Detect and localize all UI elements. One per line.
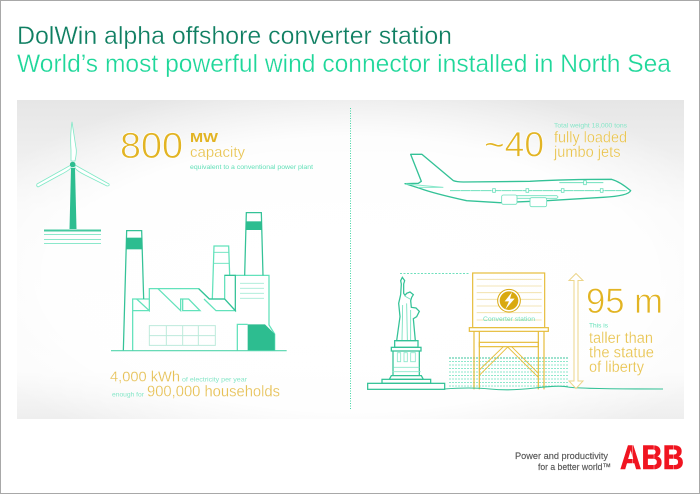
panel: background — [17, 100, 684, 419]
logo: ABB: ABB — [620, 439, 684, 477]
text: 95 m: the statue — [589, 345, 654, 362]
icon: converter station platform — [469, 273, 548, 389]
text: 40 jumbo jets: jumbo jets — [553, 144, 621, 161]
text: 95 m: This is — [589, 324, 608, 330]
title — [17, 22, 671, 78]
text: 40 jumbo jets: Total weight 18,000 tons — [554, 122, 627, 130]
text: 800 MW capacity: 800 — [120, 125, 183, 166]
text: 800 MW capacity: equivalent to a conventional power plant — [190, 164, 313, 171]
text: 95 m — [586, 282, 663, 376]
arrow: height — [569, 274, 583, 388]
title: World’s most powerful wind connector installed in North Sea — [17, 50, 671, 78]
text: 800 MW capacity — [120, 125, 313, 171]
text: 800 MW capacity: MW — [190, 130, 219, 145]
text: 800 MW capacity: capacity — [190, 144, 245, 161]
ground wave line — [444, 386, 663, 390]
icon: wind turbine — [37, 122, 109, 244]
text: 4,000 kWh households — [110, 368, 280, 401]
icon: jumbo jet — [405, 154, 631, 207]
footer tagline — [515, 451, 611, 473]
icon: statue of liberty — [368, 277, 445, 389]
text: 4,000 kWh households: enough for — [112, 393, 144, 399]
text: 95 m: taller than — [589, 330, 653, 347]
label: converter station: Converter station — [483, 316, 535, 323]
text: 40 jumbo jets: ~40 — [484, 126, 544, 165]
title: DolWin alpha offshore converter station — [17, 22, 452, 50]
text: 95 m: 95 m — [586, 282, 663, 321]
text: 95 m: of liberty — [589, 359, 644, 376]
text: 4,000 kWh households: 900,000 households — [147, 384, 280, 401]
dashed height line — [400, 272, 470, 274]
text: 40 jumbo jets — [484, 122, 627, 165]
icon: power plant — [111, 213, 287, 351]
text: 4,000 kWh households: of electricity per year — [182, 378, 247, 384]
water lines — [449, 358, 568, 386]
footer tagline: Power and productivity — [515, 451, 608, 462]
text: 4,000 kWh households: 4,000 kWh — [110, 368, 180, 386]
footer tagline: for a better world™ — [538, 462, 611, 473]
text: 40 jumbo jets: fully loaded — [554, 130, 627, 147]
